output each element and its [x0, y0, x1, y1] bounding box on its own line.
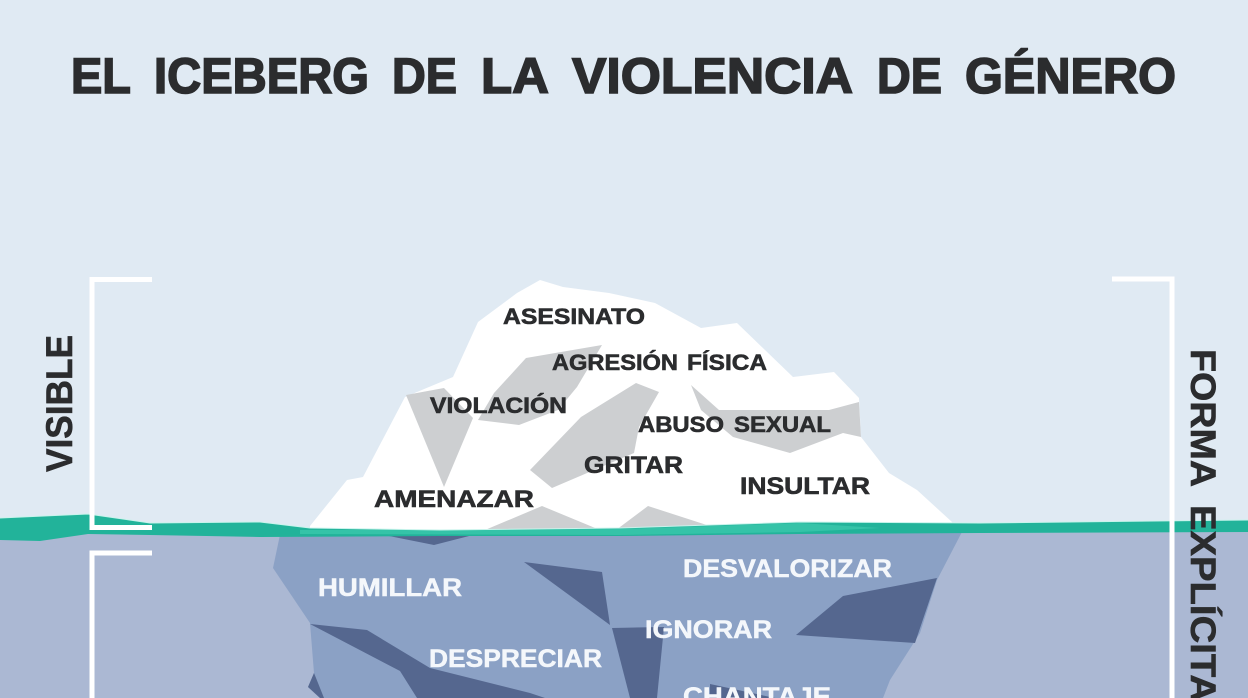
label: abuso sexual: SEXUAL	[734, 412, 831, 437]
teal wave band	[0, 514, 1248, 541]
label: abuso sexual	[638, 412, 831, 437]
label: asesinato: ASESINATO	[503, 304, 645, 329]
water line	[0, 514, 1248, 541]
title: VIOLENCIA	[572, 48, 853, 104]
label: amenazar: AMENAZAR	[374, 486, 534, 513]
submerged outline	[273, 530, 963, 698]
label: ignorar: IGNORAR	[645, 616, 772, 644]
iceberg tip outline	[310, 280, 952, 530]
side label: visible: VISIBLE	[39, 335, 80, 472]
title	[71, 48, 1176, 104]
label: agresión física	[552, 350, 767, 375]
visible iceberg above water	[310, 280, 952, 530]
title: ICEBERG	[154, 48, 369, 104]
grey facets	[406, 345, 861, 530]
title: LA	[481, 48, 549, 104]
label: gritar: GRITAR	[584, 452, 683, 479]
title: DE	[877, 48, 942, 104]
lighter wave highlight	[300, 523, 880, 535]
title: DE	[392, 48, 457, 104]
label: agresión física: FÍSICA	[687, 350, 767, 375]
left bracket: hidden	[92, 553, 152, 698]
title: EL	[71, 48, 131, 104]
label: desvalorizar: DESVALORIZAR	[683, 555, 892, 583]
side label: forma explícita: FORMA	[1183, 349, 1222, 487]
label: despreciar: DESPRECIAR	[429, 645, 602, 673]
left bracket: visible	[92, 280, 152, 528]
label: agresión física: AGRESIÓN	[552, 350, 678, 375]
water background	[0, 530, 1248, 698]
pale crest line	[0, 514, 1248, 530]
side label: forma explícita: EXPLÍCITA	[1183, 505, 1223, 698]
label: humillar: HUMILLAR	[318, 574, 462, 602]
sky background	[0, 0, 1248, 540]
label: violación: VIOLACIÓN	[430, 393, 567, 418]
side label: forma explícita	[1183, 349, 1223, 698]
label: insultar: INSULTAR	[740, 473, 870, 500]
right bracket: explicit form	[1112, 279, 1172, 698]
submerged iceberg	[273, 530, 963, 698]
title: GÉNERO	[965, 48, 1176, 104]
dark facets	[308, 535, 937, 698]
label: abuso sexual: ABUSO	[638, 412, 724, 437]
